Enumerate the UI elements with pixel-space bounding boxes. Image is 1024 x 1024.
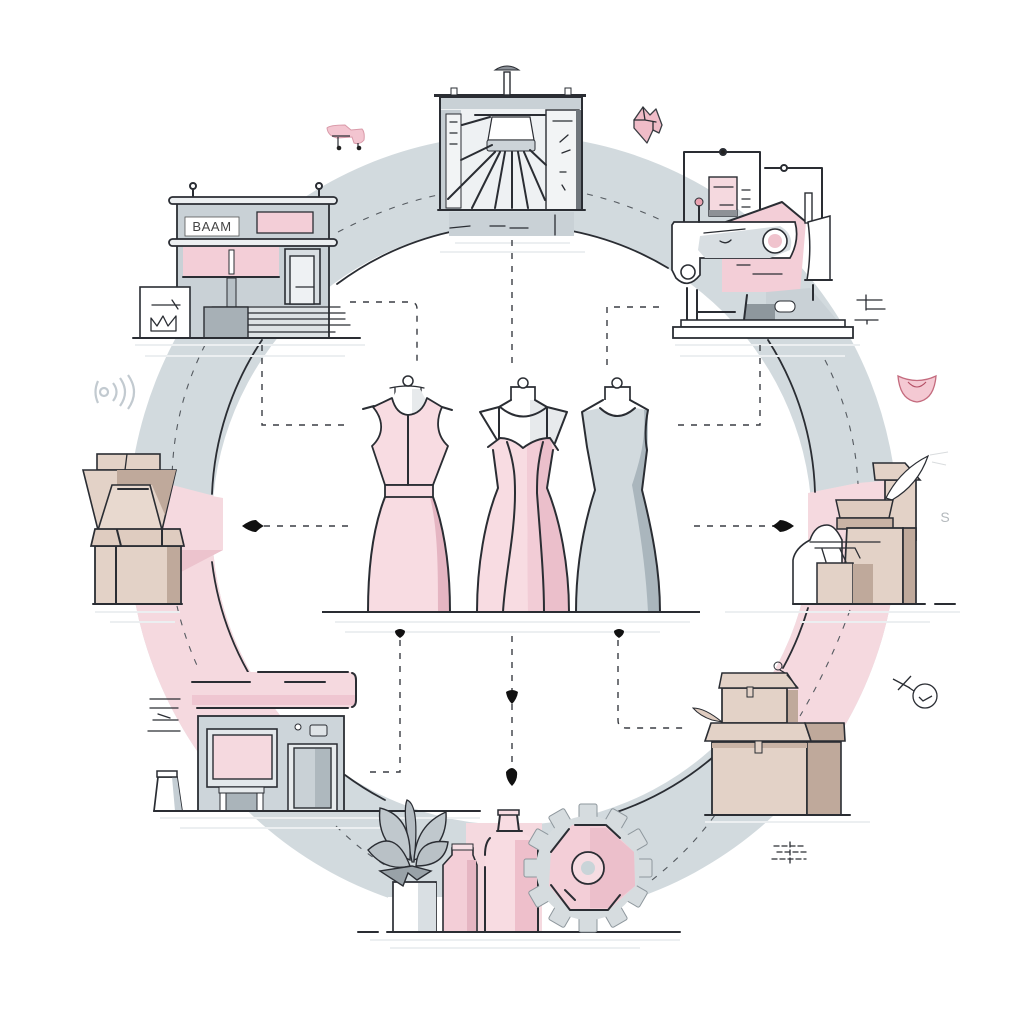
pink awning bbox=[183, 247, 279, 308]
potted plant bbox=[368, 800, 448, 932]
ring inner edges bbox=[212, 231, 815, 812]
step: parcels lower right bbox=[693, 662, 850, 815]
icon: signal waves bbox=[96, 375, 134, 409]
white sack bbox=[793, 525, 842, 604]
indicators bbox=[295, 724, 327, 736]
door bbox=[288, 744, 337, 811]
ground line bbox=[133, 337, 360, 339]
annotation marks bbox=[855, 295, 885, 324]
ring dashed guide lines bbox=[172, 194, 858, 880]
ground bbox=[358, 931, 680, 933]
ring: left pink tab bbox=[172, 485, 223, 572]
dress three bbox=[576, 378, 660, 612]
ring: bottom white base bbox=[388, 897, 638, 933]
dashed connectors bbox=[262, 240, 776, 772]
mill base bbox=[438, 210, 585, 236]
ring: right pink segment bbox=[774, 481, 890, 725]
ring: left pink segment bbox=[136, 486, 280, 750]
shop walls bbox=[177, 203, 329, 338]
large pink bottle bbox=[485, 810, 538, 932]
side text marks bbox=[148, 699, 180, 731]
mill facade bbox=[440, 97, 582, 210]
antennas bbox=[190, 183, 322, 197]
arrowheads bbox=[242, 520, 794, 786]
needle bar bbox=[805, 193, 830, 280]
step: workshop building bbox=[148, 699, 480, 811]
small pink bottle bbox=[443, 844, 477, 932]
sandwich board bbox=[140, 287, 190, 338]
step: fabric mill building bbox=[434, 66, 586, 236]
process ring bbox=[128, 135, 898, 933]
tag bbox=[693, 708, 722, 722]
center: three dresses bbox=[322, 376, 700, 612]
ground bbox=[705, 814, 850, 816]
shop sign bbox=[185, 217, 239, 236]
step: retail shop bbox=[133, 183, 360, 338]
side panels bbox=[441, 110, 581, 210]
letter mark: S bbox=[940, 509, 950, 525]
top boxes bbox=[97, 454, 160, 470]
tall box bbox=[873, 463, 920, 540]
ground bbox=[93, 603, 182, 605]
pink banner bbox=[257, 212, 313, 233]
step: stacked boxes left bbox=[83, 454, 184, 604]
grey stand shadow bbox=[735, 288, 837, 320]
icon: clock with cross bbox=[893, 676, 937, 708]
building body bbox=[198, 716, 344, 811]
icon: pink cart bbox=[327, 125, 364, 150]
small bottle bbox=[154, 771, 182, 811]
sign text: BAAM bbox=[192, 219, 232, 234]
infographic canvas bbox=[82, 66, 960, 949]
step: stacked boxes right bbox=[793, 452, 955, 604]
planter bbox=[204, 307, 248, 338]
open flaps bbox=[83, 470, 176, 530]
small front box bbox=[810, 542, 880, 604]
mid boxes bbox=[836, 500, 916, 604]
small parcel bbox=[719, 662, 798, 723]
feather bbox=[886, 452, 948, 500]
roof bar bbox=[169, 197, 337, 204]
ground bbox=[793, 603, 955, 605]
wiring frames bbox=[684, 149, 822, 225]
pink conveyor bar bbox=[192, 672, 356, 708]
hand wheel bbox=[681, 229, 787, 279]
step: sewing machine bbox=[672, 149, 885, 338]
steps bbox=[212, 306, 350, 338]
window stand bbox=[219, 787, 264, 811]
chimney bbox=[434, 66, 586, 97]
awning bar bbox=[169, 239, 337, 246]
machine base bbox=[673, 320, 853, 338]
ring: right pink tab bbox=[808, 483, 858, 560]
lamp and light rays bbox=[448, 115, 546, 208]
annotation lines bbox=[772, 842, 806, 864]
box lid bbox=[91, 529, 184, 546]
ground streaks bbox=[95, 243, 960, 948]
dress one bbox=[363, 376, 452, 612]
fabric bbox=[722, 202, 806, 292]
pattern sheet bbox=[709, 177, 750, 216]
display shelf bbox=[322, 611, 700, 613]
machine arm bbox=[698, 226, 791, 258]
shop door bbox=[285, 249, 320, 304]
step: materials group bottom bbox=[358, 800, 680, 932]
ring: grey base bbox=[128, 135, 898, 919]
ground bbox=[154, 810, 480, 812]
window bbox=[207, 729, 277, 787]
details bbox=[695, 198, 782, 274]
icon: folded fabric bbox=[634, 107, 662, 143]
box body bbox=[95, 546, 181, 604]
machine legs bbox=[687, 280, 832, 320]
ring: bottom pink panel bbox=[466, 823, 542, 931]
large parcel bbox=[705, 723, 845, 815]
gear bbox=[524, 804, 652, 932]
dress two bbox=[477, 378, 569, 612]
roof trim bbox=[441, 98, 581, 109]
machine body bbox=[672, 222, 797, 283]
icon: pink cup bbox=[898, 376, 936, 402]
